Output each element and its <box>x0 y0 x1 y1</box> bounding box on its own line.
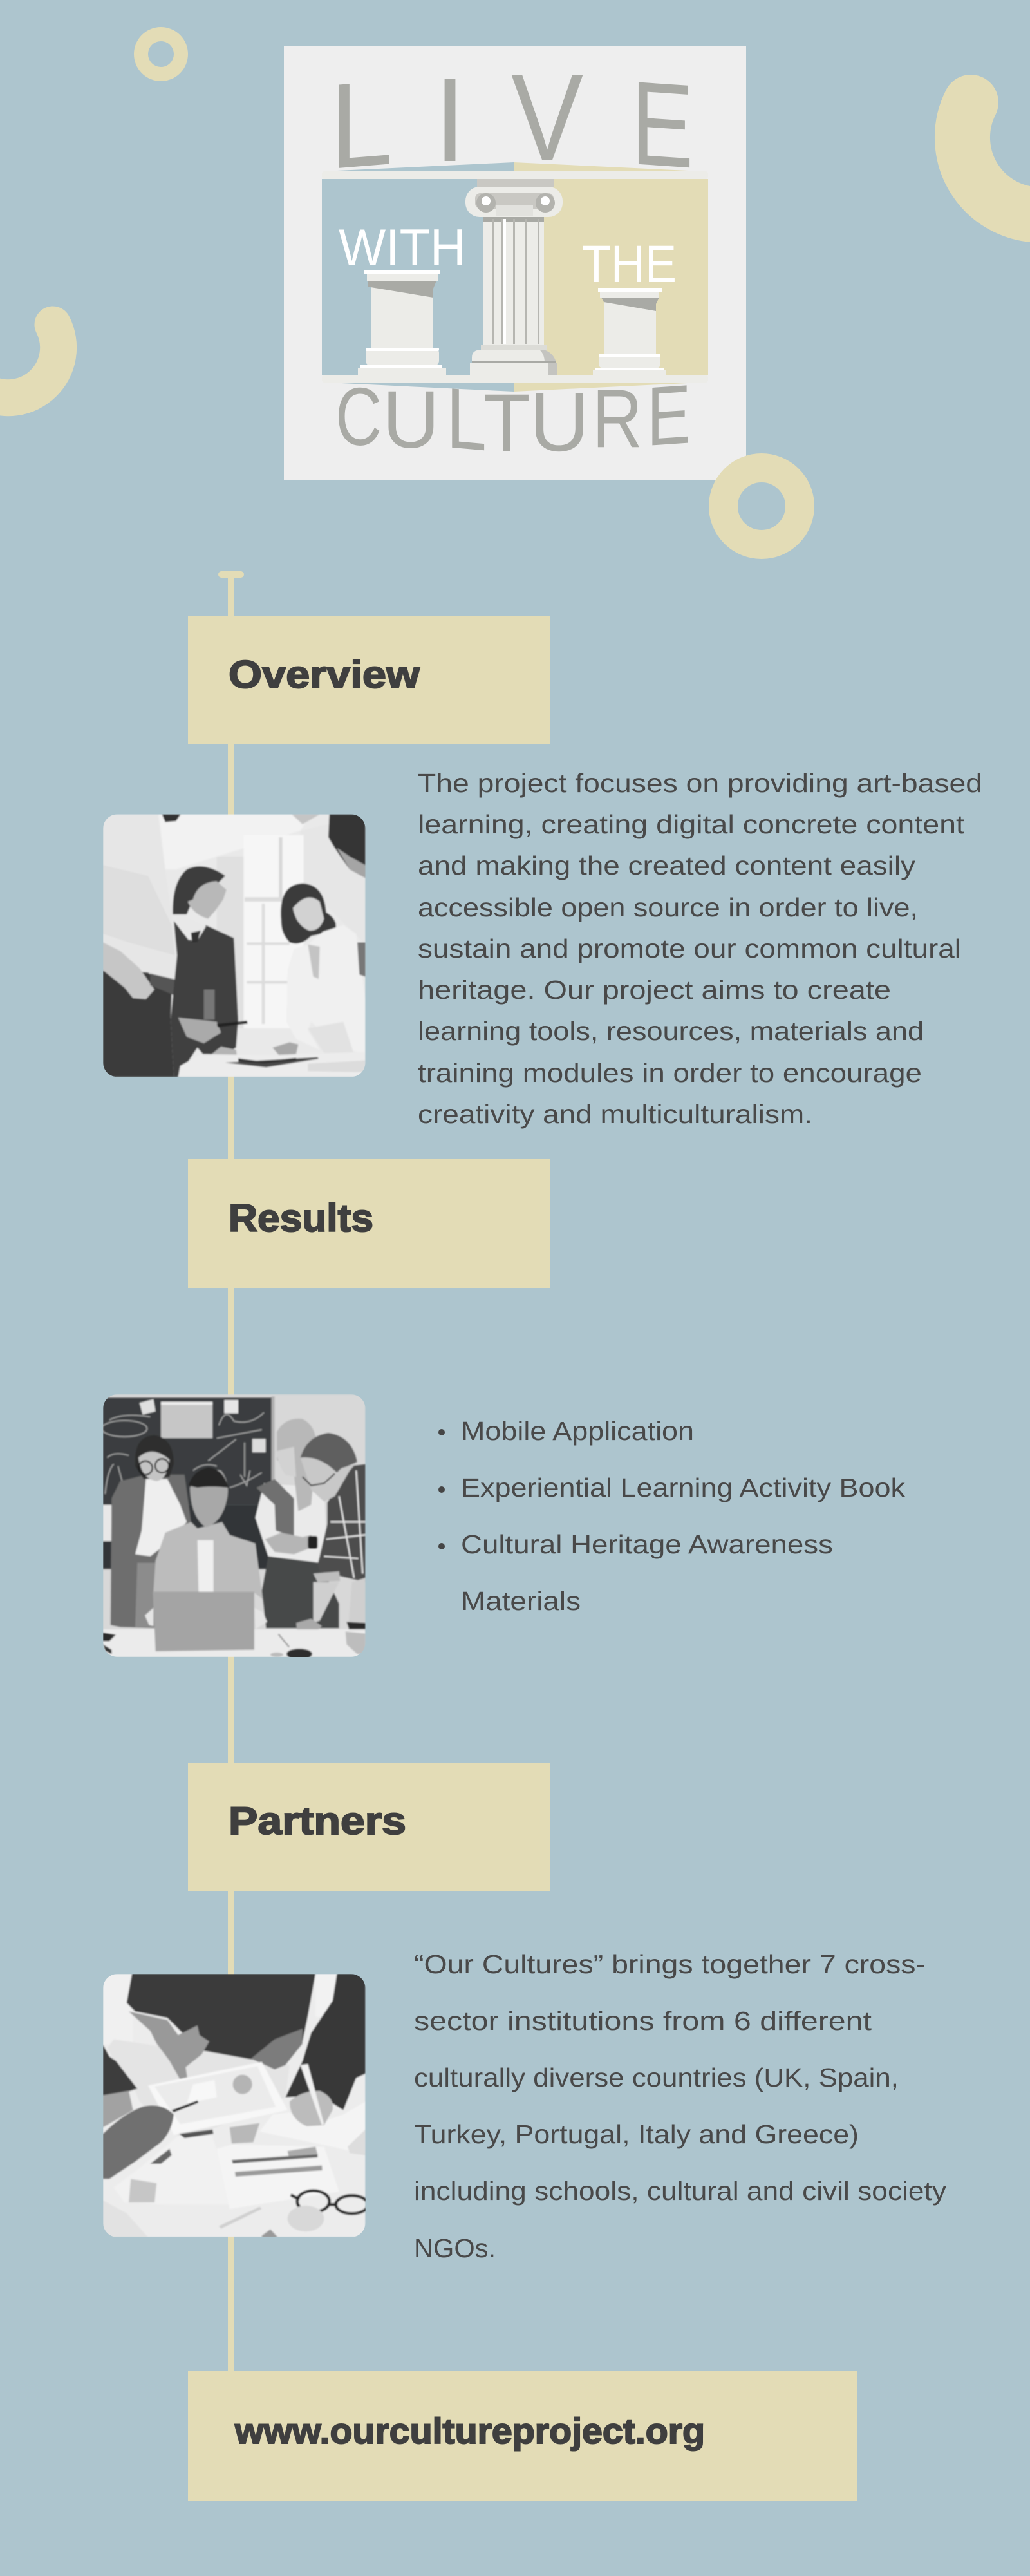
results bullet list: Experiential Learning Activity Book <box>461 1473 906 1502</box>
partners body text: sector institutions from 6 different <box>414 2006 872 2036</box>
logo word: LIVE: L <box>330 54 393 194</box>
overview body text: training modules in order to encourage <box>418 1058 922 1088</box>
decorative ring top left <box>141 34 181 74</box>
icon: right pedestal <box>593 288 666 375</box>
logo word: CULTURE: C <box>335 372 382 463</box>
photo: hands over tablet and papers <box>103 1974 368 2237</box>
logo word: CULTURE: L <box>446 370 487 469</box>
icon: left pedestal <box>358 270 446 375</box>
panel: results heading <box>188 1159 550 1288</box>
overview body text: learning tools, resources, materials and <box>418 1016 924 1046</box>
partners body text: including schools, cultural and civil society <box>414 2176 947 2206</box>
logo word: CULTURE: U <box>382 375 440 465</box>
logo word: CULTURE: T <box>483 377 530 469</box>
logo colour band <box>322 162 708 392</box>
photo: students around a laptop <box>102 1394 366 1660</box>
panel: overview heading: Overview <box>229 653 420 696</box>
results bullet list <box>438 1416 906 1616</box>
results bullet list: Materials <box>461 1586 581 1616</box>
overview body text: and making the created content easily <box>418 851 916 880</box>
panel: overview heading <box>188 616 550 744</box>
overview body text: creativity and multiculturalism. <box>418 1099 812 1129</box>
logo word: WITH: WITH <box>339 219 466 277</box>
partners body text: NGOs. <box>414 2233 496 2263</box>
logo word: LIVE: E <box>631 57 693 194</box>
partners body text: culturally diverse countries (UK, Spain, <box>414 2063 899 2092</box>
logo word: CULTURE: R <box>592 373 642 465</box>
photo: colleagues at a desk <box>103 814 366 1077</box>
partners body text <box>414 1949 947 2263</box>
overview body text: learning, creating digital concrete content <box>418 810 965 839</box>
overview body text: accessible open source in order to live, <box>418 893 918 922</box>
logo word: CULTURE: U <box>529 375 590 469</box>
logo word: CULTURE: E <box>647 366 691 464</box>
logo word: LIVE: V <box>511 49 583 186</box>
logo word: LIVE: I <box>434 52 466 187</box>
panel: partners heading <box>188 1763 550 1891</box>
panel: website footer <box>188 2371 857 2501</box>
decorative crescent right <box>962 102 1030 214</box>
timeline spine <box>218 571 244 2383</box>
logo word: THE: THE <box>582 235 677 294</box>
overview body text <box>418 768 982 1129</box>
panel: partners heading: Partners <box>229 1799 406 1842</box>
logo word: CULTURE <box>335 366 691 469</box>
panel: website footer: www.ourcultureproject.org <box>234 2410 705 2451</box>
partners body text: “Our Cultures” brings together 7 cross- <box>414 1949 926 1979</box>
overview body text: sustain and promote our common cultural <box>418 934 961 963</box>
results bullet list: Mobile Application <box>461 1416 694 1446</box>
partners body text: Turkey, Portugal, Italy and Greece) <box>414 2119 859 2149</box>
decorative crescent left <box>0 325 59 398</box>
overview body text: The project focuses on providing art-based <box>418 768 982 798</box>
logo panel: Live With The Culture <box>284 46 746 480</box>
logo word: LIVE <box>330 49 693 194</box>
results bullet list: Cultural Heritage Awareness <box>461 1530 833 1559</box>
panel: results heading: Results <box>229 1197 373 1240</box>
decorative ring bottom right <box>724 468 800 545</box>
icon: central ionic column <box>465 179 563 375</box>
overview body text: heritage. Our project aims to create <box>418 975 891 1005</box>
